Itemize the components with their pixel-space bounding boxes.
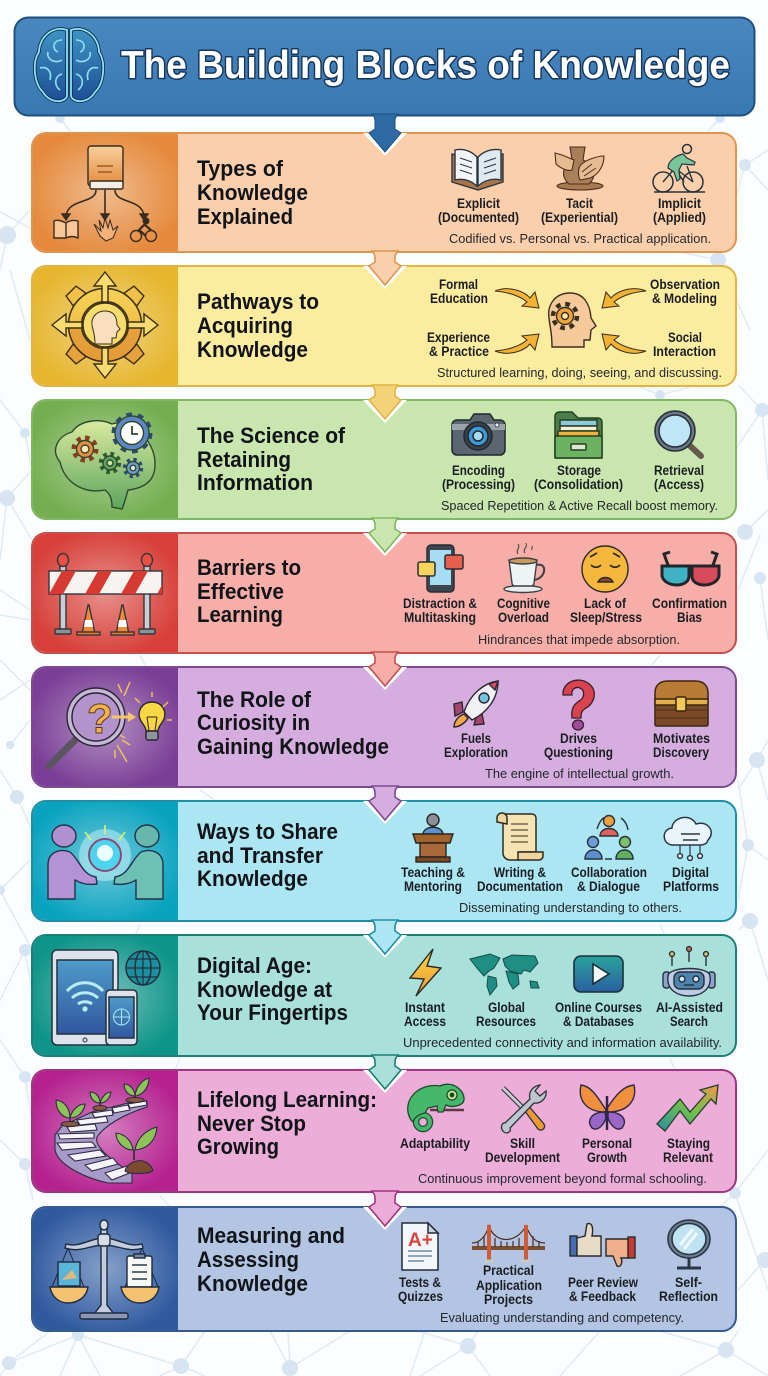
icon: spiral staircase with sprouts — [55, 1078, 157, 1183]
heading: Learning — [197, 602, 283, 627]
icon: teacher at lectern — [413, 814, 453, 862]
title banner — [14, 18, 754, 116]
labels: Tacit — [566, 196, 593, 211]
labels: (Experiential) — [541, 210, 618, 225]
caption: Evaluating understanding and competency. — [440, 1310, 684, 1325]
icon: brain with gears and clock — [56, 415, 155, 509]
arrow: panel 6 to panel 7 — [363, 920, 407, 958]
icon: 3D glasses — [662, 552, 719, 585]
heading — [197, 289, 319, 362]
labels: (Documented) — [438, 210, 519, 225]
panel: barriers to effective learning — [32, 533, 736, 653]
heading — [197, 1223, 345, 1296]
heading — [197, 423, 345, 495]
labels: Bias — [677, 610, 702, 625]
panel: lifelong learning — [32, 1070, 736, 1192]
heading: Your Fingertips — [197, 1000, 348, 1025]
labels — [442, 463, 704, 492]
labels — [403, 596, 727, 625]
labels — [404, 1000, 723, 1029]
icon: magnifier — [655, 411, 701, 456]
labels: Drives — [560, 731, 597, 746]
labels: Distraction & — [403, 596, 477, 611]
arrow: panel 2 to panel 3 — [363, 385, 407, 423]
labels — [427, 277, 720, 359]
icon: four curved arrows — [495, 289, 646, 353]
labels: Application — [476, 1278, 542, 1293]
heading: The Role of — [197, 687, 311, 712]
labels: Explicit — [457, 196, 500, 211]
heading — [197, 687, 389, 759]
icon: three people collaborating — [585, 816, 633, 859]
icon: treasure chest — [655, 681, 708, 726]
caption: Hindrances that impede absorption. — [478, 632, 680, 647]
icon: two people sharing a glowing orb — [48, 825, 163, 899]
labels: Observation — [650, 277, 720, 292]
heading: Knowledge at — [197, 977, 332, 1002]
icon: magnifier, question mark and light bulb — [49, 682, 172, 766]
heading: Explained — [197, 204, 293, 229]
labels: Global — [488, 1000, 525, 1015]
panel: role of curiosity — [32, 667, 736, 787]
labels: Social — [668, 330, 702, 345]
labels: & Dialogue — [577, 879, 640, 894]
labels: Peer Review — [568, 1275, 638, 1290]
icon: video play button — [574, 956, 623, 992]
icon: suspension bridge — [472, 1225, 545, 1261]
labels: Personal — [582, 1136, 632, 1151]
labels: Education — [430, 291, 488, 306]
labels: Search — [670, 1014, 708, 1029]
labels: Digital — [672, 865, 709, 880]
icon: brain — [35, 29, 103, 101]
labels: Reflection — [659, 1289, 718, 1304]
labels: & Feedback — [569, 1289, 636, 1304]
heading: Curiosity in — [197, 710, 310, 735]
icon: question mark — [563, 680, 594, 730]
icon: AI robot — [663, 947, 715, 996]
labels: Resources — [476, 1014, 536, 1029]
icon: world map — [470, 954, 539, 995]
panel: ways to share knowledge — [32, 801, 736, 921]
icon: chameleon — [408, 1084, 464, 1129]
heading: Gaining Knowledge — [197, 734, 389, 759]
icon: cyclist — [653, 144, 705, 192]
labels: Teaching & — [401, 865, 465, 880]
icon: pottery and hands — [555, 147, 604, 190]
caption: Spaced Repetition & Active Recall boost memory. — [441, 498, 718, 513]
heading: Pathways to — [197, 289, 319, 314]
labels: Storage — [557, 463, 601, 478]
labels: Experience — [427, 330, 490, 345]
arrow: panel 7 to panel 8 — [363, 1055, 407, 1093]
labels: Collaboration — [571, 865, 647, 880]
heading: Ways to Share — [197, 819, 338, 844]
labels: Documentation — [477, 879, 563, 894]
labels: Fuels — [461, 731, 491, 746]
labels: Confirmation — [652, 596, 727, 611]
labels: & Modeling — [652, 291, 717, 306]
heading: Measuring and — [197, 1223, 345, 1248]
heading: Types of — [197, 156, 283, 181]
icon: butterfly — [580, 1085, 635, 1130]
labels: Formal — [439, 277, 478, 292]
labels: Retrieval — [654, 463, 704, 478]
icon: wrench and screwdriver — [502, 1085, 546, 1133]
heading — [197, 1087, 377, 1159]
labels — [398, 1263, 718, 1307]
title text: The Building Blocks of Knowledge — [121, 44, 730, 87]
labels: Development — [485, 1150, 560, 1165]
icon: digital cloud platform — [664, 817, 711, 860]
labels — [400, 1136, 713, 1165]
icon: head with gear — [549, 293, 596, 347]
labels: Multitasking — [404, 610, 476, 625]
labels: AI-Assisted — [656, 1000, 723, 1015]
icon: camera — [452, 414, 505, 455]
caption: The engine of intellectual growth. — [485, 766, 674, 781]
heading: Growing — [197, 1134, 279, 1159]
heading: Effective — [197, 579, 284, 604]
heading: Acquiring — [197, 313, 293, 338]
heading: Retaining — [197, 447, 291, 472]
labels: Implicit — [658, 196, 701, 211]
panel: science of retaining information — [32, 400, 736, 519]
panel: digital age — [32, 935, 736, 1056]
caption: Disseminating understanding to others. — [459, 900, 682, 915]
icon: coffee cup — [504, 543, 544, 592]
icon: rising trend arrow — [657, 1085, 718, 1131]
caption: Codified vs. Personal vs. Practical application. — [449, 231, 711, 246]
labels: Writing & — [494, 865, 546, 880]
labels: Motivates — [653, 731, 710, 746]
arrow: panel 8 to panel 9 — [363, 1191, 407, 1230]
heading: Never Stop — [197, 1111, 306, 1136]
icon: scroll — [497, 813, 543, 860]
heading: and Transfer — [197, 843, 323, 868]
labels: (Consolidation) — [534, 477, 623, 492]
labels: Online Courses — [555, 1000, 642, 1015]
heading: Knowledge — [197, 1271, 308, 1296]
labels: Overload — [498, 610, 549, 625]
labels — [438, 196, 706, 225]
heading: Knowledge — [197, 180, 308, 205]
icon: gear with four arrows and head — [52, 272, 158, 378]
labels: Quizzes — [398, 1289, 443, 1304]
icon: road barricade and cones — [49, 554, 162, 635]
icon: hand mirror — [668, 1220, 710, 1268]
labels: Tests & — [399, 1275, 441, 1290]
labels — [444, 731, 710, 760]
caption: Continuous improvement beyond formal schooling. — [418, 1171, 707, 1186]
labels — [401, 865, 719, 894]
labels: Projects — [484, 1292, 533, 1307]
labels: (Applied) — [653, 210, 706, 225]
labels: & Practice — [429, 344, 489, 359]
icon: tablet, phone and globe — [52, 950, 160, 1045]
labels: Discovery — [653, 745, 709, 760]
caption: Structured learning, doing, seeing, and discussing. — [437, 365, 722, 380]
labels: Sleep/Stress — [570, 610, 642, 625]
heading: Barriers to — [197, 555, 301, 580]
labels: Platforms — [663, 879, 719, 894]
heading: Assessing — [197, 1247, 299, 1272]
labels: Instant — [405, 1000, 445, 1015]
arrow: panel 3 to panel 4 — [363, 518, 407, 556]
labels: Cognitive — [497, 596, 550, 611]
labels: Lack of — [584, 596, 626, 611]
heading: Digital Age: — [197, 953, 312, 978]
labels: Exploration — [444, 745, 508, 760]
heading: Information — [197, 470, 313, 495]
panel: types of knowledge — [32, 133, 736, 252]
heading: Knowledge — [197, 866, 308, 891]
caption: Unprecedented connectivity and information availability. — [403, 1035, 722, 1050]
labels: Interaction — [653, 344, 716, 359]
labels: Practical — [483, 1263, 534, 1278]
heading — [197, 819, 338, 891]
panel: measuring and assessing knowledge — [32, 1207, 736, 1331]
labels: Staying — [667, 1136, 710, 1151]
labels: Skill — [510, 1136, 535, 1151]
arrow: panel 5 to panel 6 — [363, 786, 407, 824]
heading: Knowledge — [197, 337, 308, 362]
labels: (Access) — [654, 477, 704, 492]
icon: magnifier, question mark and light bulb: ? — [87, 695, 113, 742]
heading — [197, 555, 301, 627]
labels: Relevant — [663, 1150, 713, 1165]
icon: graded test paper: A+ — [408, 1230, 433, 1251]
labels: Questioning — [544, 745, 613, 760]
arrow: panel 1 to panel 2 — [363, 251, 407, 289]
labels: Growth — [587, 1150, 627, 1165]
labels: Self- — [675, 1275, 702, 1290]
labels: Mentoring — [404, 879, 462, 894]
icon: tired face — [582, 546, 628, 592]
icon: smartphone with chat bubbles — [418, 545, 463, 592]
labels: Access — [404, 1014, 446, 1029]
icon: file drawer — [555, 412, 602, 458]
heading — [197, 953, 348, 1025]
icon: rocket — [454, 681, 498, 727]
heading: Lifelong Learning: — [197, 1087, 377, 1112]
icon: balance scale — [50, 1220, 159, 1319]
panel: pathways to acquiring knowledge — [32, 266, 736, 386]
icon: graded test paper — [402, 1223, 438, 1270]
icon: lightning bolt — [410, 949, 441, 996]
icon: open book — [452, 149, 503, 190]
icon: book branching into three knowledge types — [54, 146, 156, 242]
labels: (Processing) — [442, 477, 515, 492]
arrow: title to panel 1 — [363, 114, 407, 156]
heading — [197, 156, 308, 229]
arrow: panel 4 to panel 5 — [363, 652, 407, 690]
labels: & Databases — [563, 1014, 634, 1029]
icon: thumbs up and down — [570, 1224, 635, 1266]
labels: Adaptability — [400, 1136, 470, 1151]
labels: Encoding — [452, 463, 505, 478]
heading: The Science of — [197, 423, 345, 448]
